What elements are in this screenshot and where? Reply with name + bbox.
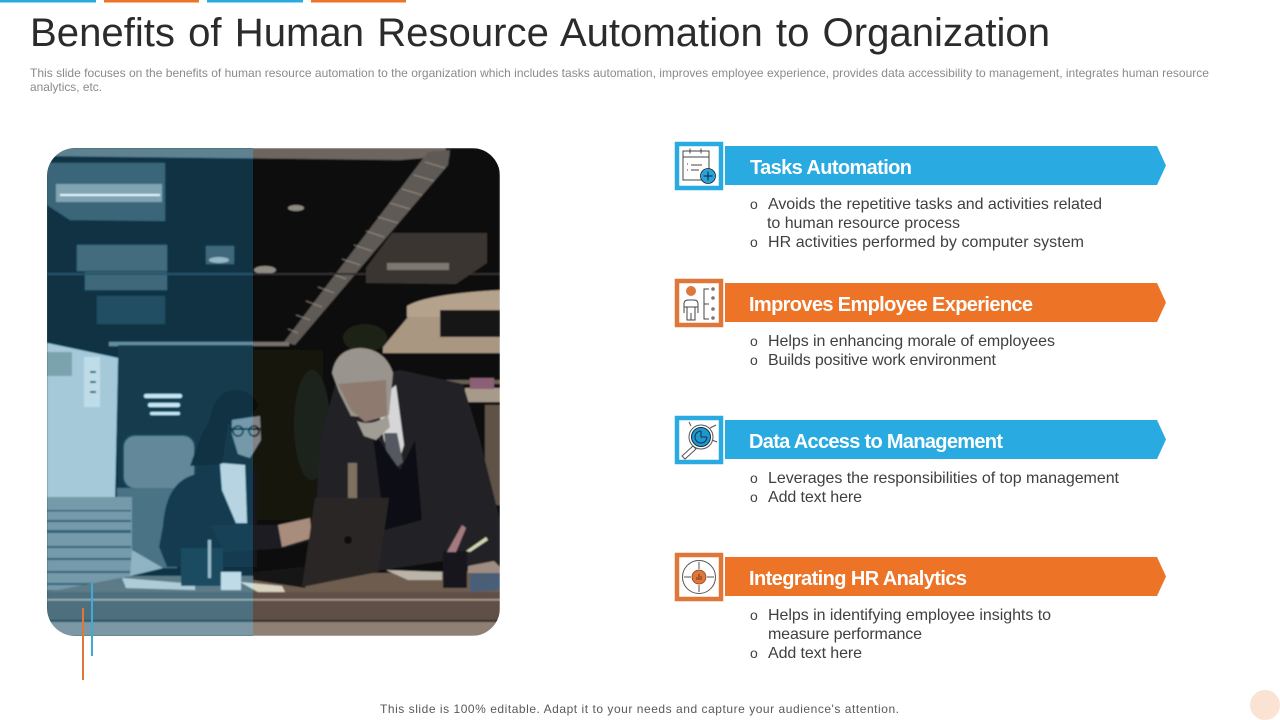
laptop: [302, 498, 389, 587]
bullet list: o: [750, 196, 758, 212]
lamp stripes: [144, 394, 182, 415]
icon: person with org chart: [677, 281, 721, 325]
bullet list: o: [750, 645, 758, 661]
paper stacks: [47, 497, 132, 592]
bullet list: [750, 607, 1051, 662]
bullet list: o: [750, 333, 758, 349]
woman: hair and face: [190, 390, 258, 466]
banner: [725, 420, 1166, 459]
pen cup: [443, 551, 467, 588]
bullet list: Leverages the responsibilities of top management: [768, 470, 1120, 487]
bullet list: [750, 470, 1120, 506]
chair: [123, 435, 195, 489]
man: suit: [317, 370, 500, 575]
description text: This slide focuses on the benefits of human resource automation to the organization which includes tasks automation, improves employee experience, provides data accessibility to management, integrates human resource: [30, 66, 1209, 80]
bullet list: o: [750, 470, 758, 486]
bullet list: Helps in identifying employee insights to: [768, 607, 1051, 624]
description text: analytics, etc.: [30, 80, 102, 94]
banner: [725, 557, 1166, 596]
bullet list: Avoids the repetitive tasks and activities related: [768, 196, 1102, 213]
woman: jacket: [159, 463, 257, 567]
blue glow overlay: [47, 148, 253, 636]
bullet list: measure performance: [768, 626, 922, 643]
horizontal pipe: [109, 342, 289, 346]
icon: analytics target: [677, 555, 721, 599]
desk: [47, 590, 500, 621]
blue folders: [470, 570, 500, 592]
banner heading: Data Access to Management: [749, 431, 1003, 453]
banner: [725, 146, 1166, 185]
back wall behind woman: [117, 344, 254, 486]
accent line: orange: [82, 608, 84, 680]
bullet list: Builds positive work environment: [768, 352, 997, 369]
bullet list: o: [750, 352, 758, 368]
ceiling pipe: [47, 148, 450, 160]
diagonal duct: [284, 150, 450, 345]
curved shelf right: [407, 290, 500, 317]
keyboard: [253, 566, 310, 588]
bullet list: o: [750, 489, 758, 505]
corner page marker: [1250, 690, 1280, 720]
document on desk: [386, 570, 442, 580]
title: Benefits of Human Resource Automation to Organization: [30, 11, 1050, 55]
item 1: tasks automation: [677, 144, 1166, 251]
bullet list: Add text here: [768, 645, 862, 662]
woman: arm: [256, 516, 310, 550]
plants: [343, 324, 387, 352]
bullet list: HR activities performed by computer system: [768, 234, 1084, 251]
ceiling unit right: [366, 233, 487, 284]
description text: [30, 66, 1209, 94]
item 2: improves employee experience: [677, 281, 1166, 369]
banner heading: Tasks Automation: [750, 157, 912, 179]
bullet list: o: [750, 234, 758, 250]
icon: magnifier with pie chart: [677, 418, 721, 462]
notebook: [122, 578, 195, 590]
footer note: This slide is 100% editable. Adapt it to your needs and capture your audience's attention.: [380, 702, 899, 716]
accent line: blue: [91, 583, 93, 656]
top accent bars: [0, 0, 406, 2]
icon: calendar with plus: [677, 144, 721, 188]
blue hue overlay: [47, 148, 253, 636]
ceiling units left: [47, 163, 165, 221]
bullet list: o: [750, 607, 758, 623]
bullet list: [750, 333, 1055, 369]
banner heading: Integrating HR Analytics: [749, 568, 967, 590]
whiteboard: [47, 343, 118, 498]
photo: two colleagues at an office desk: [47, 148, 500, 636]
item 3: data access to management: [677, 418, 1166, 506]
banner: [725, 283, 1166, 322]
desk items: [181, 548, 223, 586]
item 4: integrating HR analytics: [677, 555, 1166, 662]
bullet list: [750, 196, 1102, 251]
man: head: [332, 348, 393, 418]
bullet list: to human resource process: [767, 215, 960, 232]
banner heading: Improves Employee Experience: [749, 294, 1033, 316]
bullet list: Helps in enhancing morale of employees: [768, 333, 1055, 350]
bullet list: Add text here: [768, 489, 862, 506]
